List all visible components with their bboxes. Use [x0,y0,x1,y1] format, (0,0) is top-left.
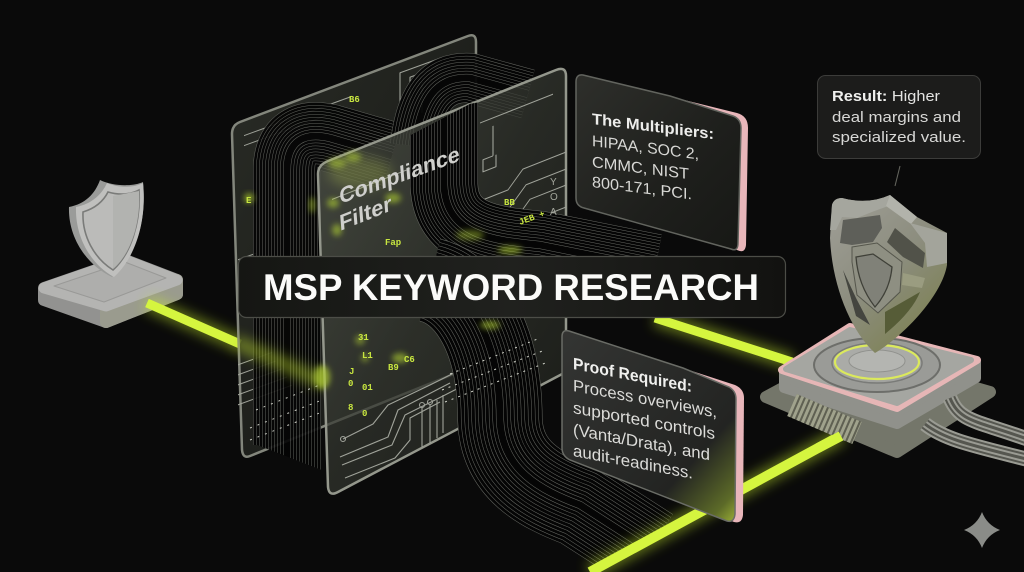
title [238,256,786,318]
circuit traces [332,89,566,389]
card: Proof Required: audit-readiness. [573,441,693,483]
circuit micro-labels: 01 [362,383,373,393]
output cables [925,398,1024,460]
card: The Multipliers: HIPAA, SOC 2, [592,133,699,163]
connector ribs [792,405,857,448]
dashed trace highlights over left wires [250,384,322,440]
neon beam to right platform base [590,435,842,572]
basic shield [69,180,144,277]
plate lettering: A [550,207,557,218]
circuit micro-labels: 0 [362,409,367,419]
callout: Result [818,76,980,186]
card: The Multipliers [576,75,748,251]
card: The Multipliers: The Multipliers: [592,111,714,143]
card: Proof Required [562,331,744,522]
circuit micro-labels: 0 [348,379,353,389]
title: MSP KEYWORD RESEARCH [263,267,759,308]
connector line [895,166,900,186]
circuit micro-labels: Fap [385,238,401,248]
card: The Multipliers: 800-171, PCI. [592,174,692,203]
green glow through the back plate [236,193,325,383]
circuit micro-labels: JEB + [518,209,546,228]
armored shield [830,195,947,353]
text block: Compliance Filter: Compliance [338,140,460,209]
circuit micro-labels: J [349,367,354,377]
callout: Result: deal margins and [832,110,961,126]
platform dial [814,338,940,392]
circuit micro-labels: B6 [349,95,360,105]
plate lettering: Y [550,177,557,188]
card: Proof Required: (Vanta/Drata), and [573,420,710,464]
callout: Result: specialized value. [832,130,966,146]
wire bundle: left column [287,136,392,480]
plate lettering [550,177,558,218]
circuit micro-labels: C6 [404,355,415,365]
platform base layers [766,327,990,452]
callout: Result: Result: Higher [832,89,940,105]
icon: sparkle [964,512,1000,548]
text block: Compliance Filter [338,140,460,236]
panel: back circuit plate [232,35,476,457]
wire bundle: front arch [444,90,655,268]
circuit micro-labels: L1 [362,351,373,361]
wire bundle: lower flow to proof card [430,280,650,550]
neon beam to right platform [655,318,792,362]
card: Proof Required: Process overviews, [573,376,717,422]
circuit micro-labels: E [246,196,252,206]
right platform with armored shield [766,195,1024,460]
card: Proof Required: supported controls [573,398,715,443]
circuit micro-labels: 8 [348,403,353,413]
circuit micro-labels: BB [504,198,515,208]
panel: front compliance filter plate [318,69,566,494]
neon beam from left platform [147,303,240,344]
card: The Multipliers: CMMC, NIST [592,154,690,183]
wire bundle: rear arch [415,78,528,146]
green glow spots on front plate [314,152,522,389]
circuit micro-labels: 31 [358,333,369,343]
circuit micro-labels [246,95,546,419]
plate lettering: O [550,192,558,203]
platform base [44,260,177,322]
card: Proof Required: Proof Required: [573,354,692,396]
text block: Compliance Filter: Filter [338,190,392,236]
circuit micro-labels: B9 [388,363,399,373]
dashed trace highlights over centre wires [442,338,548,402]
left platform with basic shield [44,180,177,322]
lower circuit traces [340,365,478,478]
